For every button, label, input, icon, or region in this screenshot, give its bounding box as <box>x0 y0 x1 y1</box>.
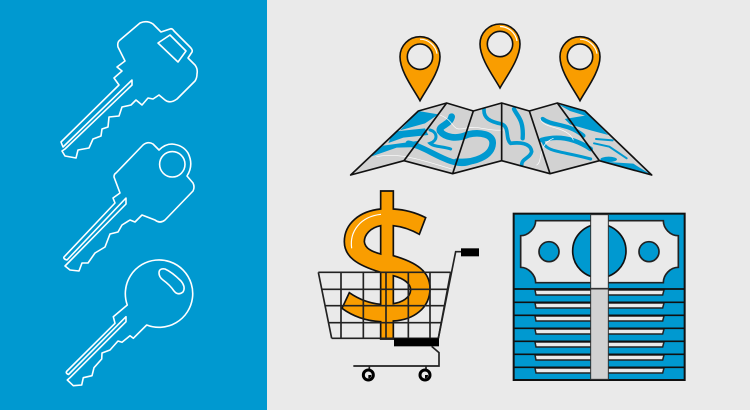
banknote left circle <box>539 242 559 262</box>
icon: right map pin <box>560 37 600 101</box>
top banknote <box>521 221 678 283</box>
icon: stack of banknotes <box>514 214 685 380</box>
icon: centre map pin <box>480 24 520 88</box>
map rivers <box>372 104 653 176</box>
banknote right circle <box>639 242 659 262</box>
icon: left map pin <box>400 37 440 101</box>
banknote centre circle <box>573 224 626 278</box>
map fold lines and outline <box>351 103 652 175</box>
key ring hole <box>160 152 185 177</box>
blue left panel <box>0 0 267 410</box>
cart handle <box>438 252 462 338</box>
dollar sign <box>342 191 430 339</box>
right wheel <box>420 370 430 380</box>
cart base bar <box>394 338 439 346</box>
key oval slot <box>159 269 184 294</box>
map sheet <box>351 103 652 175</box>
icon: bottom key <box>66 260 193 386</box>
dollar highlight <box>351 214 381 248</box>
cart basket grid <box>318 272 451 338</box>
icon: folded map <box>351 103 653 176</box>
paper band upper <box>591 215 608 288</box>
icon: middle key <box>64 143 194 271</box>
cart handle grip <box>461 248 479 256</box>
paper band lower <box>591 289 608 379</box>
icon: shopping cart with dollar sign <box>318 191 479 380</box>
stack divider lines <box>514 289 685 367</box>
stack background <box>514 214 685 380</box>
stacked note edges <box>535 290 664 373</box>
left wheel <box>363 370 373 380</box>
cart undercarriage <box>353 346 439 370</box>
icon: top key <box>61 22 197 158</box>
key slot <box>158 35 186 62</box>
